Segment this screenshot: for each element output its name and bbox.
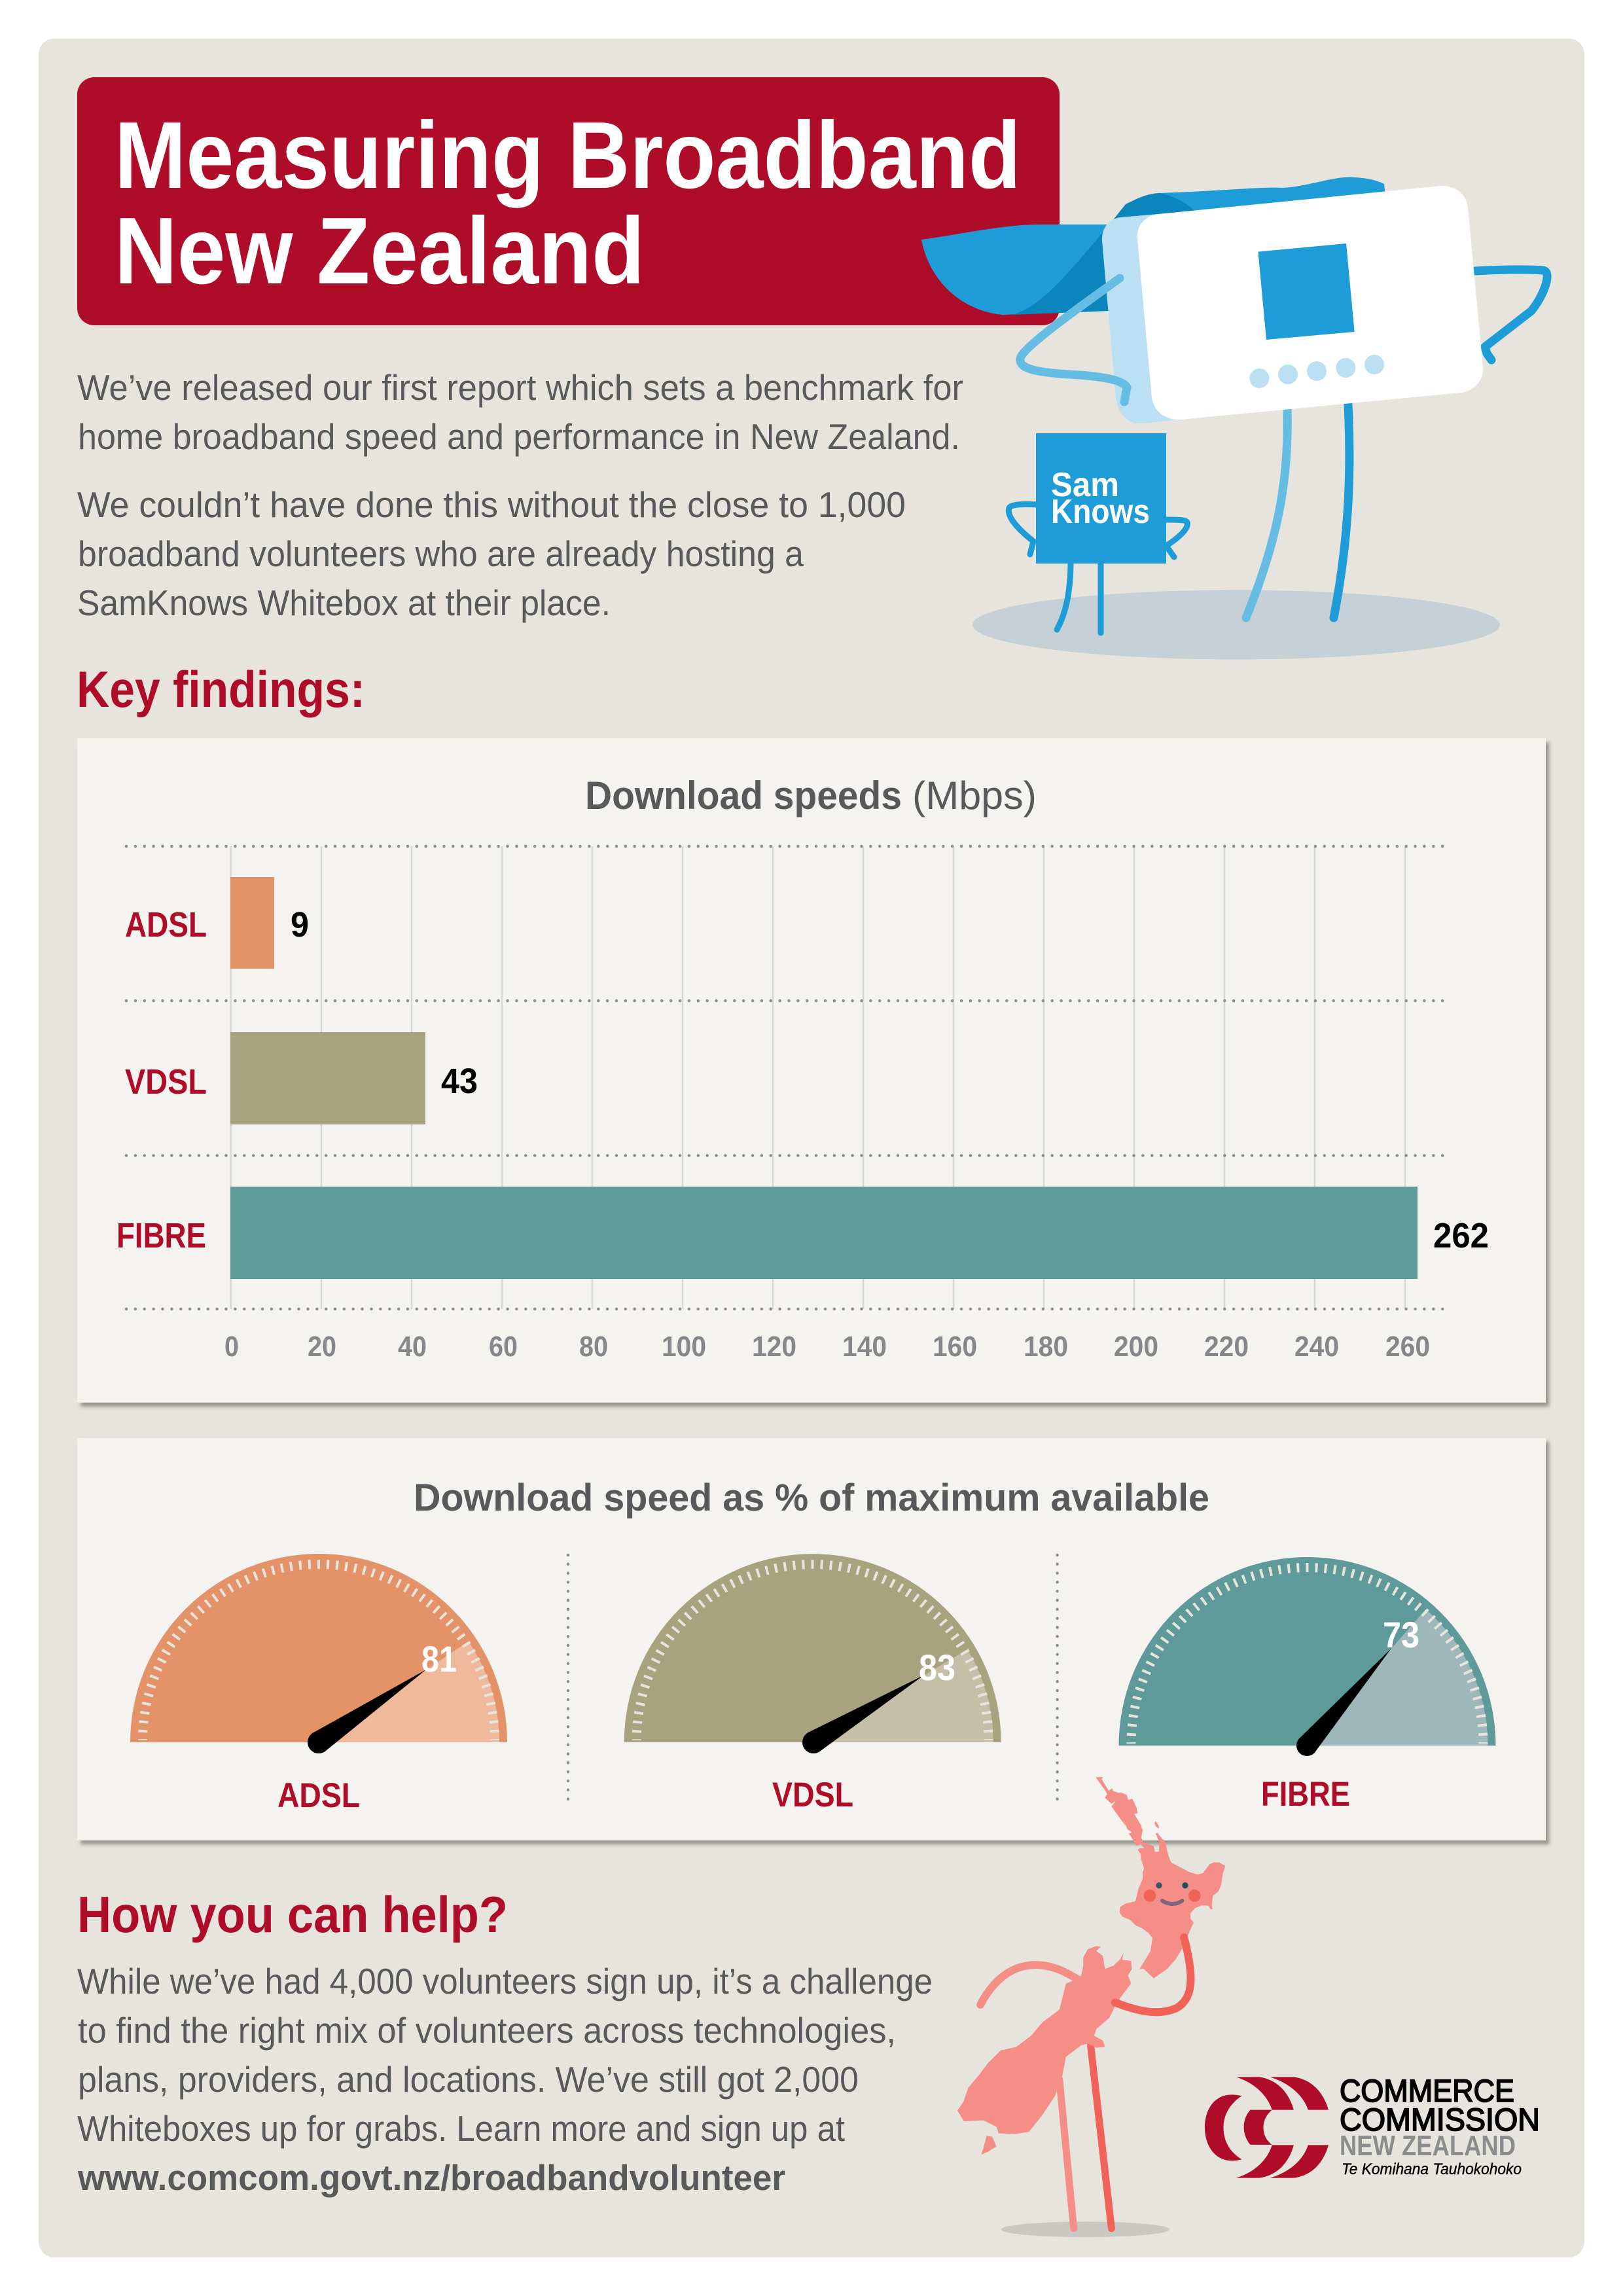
value: 81	[421, 1638, 457, 1679]
needle	[802, 1676, 923, 1753]
router screen	[1258, 243, 1355, 340]
bar values: 262	[1433, 1216, 1489, 1255]
intro text: home broadband speed and performance in New Zealand.	[78, 416, 960, 457]
needle	[308, 1670, 426, 1753]
x axis labels: 260	[1385, 1331, 1430, 1363]
x axis labels	[224, 1331, 1430, 1363]
x axis labels: 140	[842, 1331, 887, 1363]
chart title: (Mbps)	[912, 774, 1037, 817]
ground shadow	[972, 590, 1500, 660]
intro text: SamKnows Whitebox at their place.	[77, 583, 611, 623]
call to action text: While we’ve had 4,000 volunteers sign up, it’s a challenge	[77, 1961, 933, 2001]
x axis labels: 20	[308, 1331, 336, 1363]
value: 83	[919, 1647, 955, 1688]
x axis labels: 40	[398, 1331, 427, 1363]
bar values: 9	[291, 905, 309, 944]
SamKnows wordmark: Knows	[1051, 493, 1150, 531]
panel: download speeds chart	[77, 738, 1546, 1403]
South Island	[957, 1946, 1132, 2155]
intro text: We’ve released our first report which sets a benchmark for	[77, 367, 963, 408]
call to action text	[77, 1961, 933, 2198]
chart title: Download speeds	[585, 774, 902, 817]
title banner	[77, 77, 1060, 325]
x axis labels: 80	[579, 1331, 608, 1363]
SamKnows box character	[1008, 433, 1187, 633]
illustration: New Zealand map character	[957, 1777, 1225, 2237]
intro text: broadband volunteers who are already hosting a	[78, 533, 804, 574]
bar category labels: FIBRE	[116, 1216, 206, 1255]
SamKnows wordmark: Sam	[1051, 466, 1119, 504]
title text	[115, 102, 1021, 304]
call to action text: plans, providers, and locations. We’ve still got 2,000	[78, 2059, 859, 2100]
x axis labels: 100	[662, 1331, 706, 1363]
needle	[1296, 1649, 1391, 1756]
logo wordmark: COMMERCE	[1340, 2074, 1514, 2109]
router body	[1102, 186, 1483, 423]
bar category labels	[116, 905, 207, 1255]
title text: Measuring Broadband	[115, 102, 1021, 208]
x axis labels: 200	[1114, 1331, 1158, 1363]
panel: download speed as percent of maximum	[77, 1438, 1546, 1840]
gauge: FIBRE	[1119, 1557, 1496, 1814]
dotted dividers	[568, 1555, 1058, 1800]
logo wordmark: COMMISSION	[1340, 2103, 1540, 2138]
bar category labels: ADSL	[125, 905, 207, 944]
title text: New Zealand	[115, 198, 645, 304]
panel title: Download speed as % of maximum available	[414, 1477, 1209, 1519]
bar category labels: VDSL	[125, 1062, 207, 1102]
website link: www.comcom.govt.nz/broadbandvolunteer	[77, 2157, 785, 2198]
bar chart	[116, 846, 1489, 1363]
SamKnows wordmark	[1051, 466, 1150, 531]
illustration: Whitebox router character with SamKnows box	[921, 177, 1547, 660]
x axis labels: 120	[752, 1331, 796, 1363]
North Island	[1096, 1777, 1225, 1979]
label: FIBRE	[1261, 1775, 1350, 1814]
x axis labels: 0	[224, 1331, 239, 1363]
intro text: We couldn’t have done this without the close to 1,000	[77, 484, 906, 525]
bar: VDSL	[230, 1032, 425, 1124]
gauge: VDSL	[624, 1554, 1001, 1814]
logo wordmark: Te Komihana Tauhokohoko	[1342, 2161, 1522, 2178]
bar values: 43	[441, 1062, 478, 1101]
intro text	[77, 367, 963, 623]
logo wordmark: NEW ZEALAND	[1340, 2130, 1516, 2162]
limbs and ground shadow behind map	[980, 1965, 1169, 2237]
x axis labels: 180	[1024, 1331, 1068, 1363]
router legs	[1246, 404, 1349, 618]
router right arm	[1475, 270, 1547, 360]
x axis labels: 160	[933, 1331, 977, 1363]
logo mark	[1205, 2077, 1329, 2178]
logo: Commerce Commission	[1205, 2074, 1540, 2178]
front arm	[1115, 1937, 1190, 2012]
heading: key findings: Key findings:	[77, 660, 365, 718]
label: VDSL	[772, 1776, 853, 1814]
router left arm	[1020, 278, 1127, 402]
x axis labels: 60	[489, 1331, 518, 1363]
bar: ADSL	[230, 877, 274, 969]
x axis labels: 220	[1204, 1331, 1249, 1363]
router lights	[1249, 355, 1384, 388]
label: ADSL	[277, 1776, 360, 1815]
heading: how you can help: How you can help?	[77, 1886, 508, 1943]
face	[1144, 1882, 1201, 1904]
call to action text: Whiteboxes up for grabs. Learn more and sign up at	[77, 2108, 845, 2149]
bar values	[291, 905, 1489, 1255]
call to action text: to find the right mix of volunteers across technologies,	[78, 2010, 896, 2051]
gauge: ADSL	[130, 1554, 507, 1815]
bar: FIBRE	[230, 1187, 1418, 1279]
router cape	[921, 177, 1385, 315]
logo wordmark	[1340, 2074, 1540, 2178]
x axis labels: 240	[1294, 1331, 1339, 1363]
value: 73	[1383, 1614, 1419, 1655]
